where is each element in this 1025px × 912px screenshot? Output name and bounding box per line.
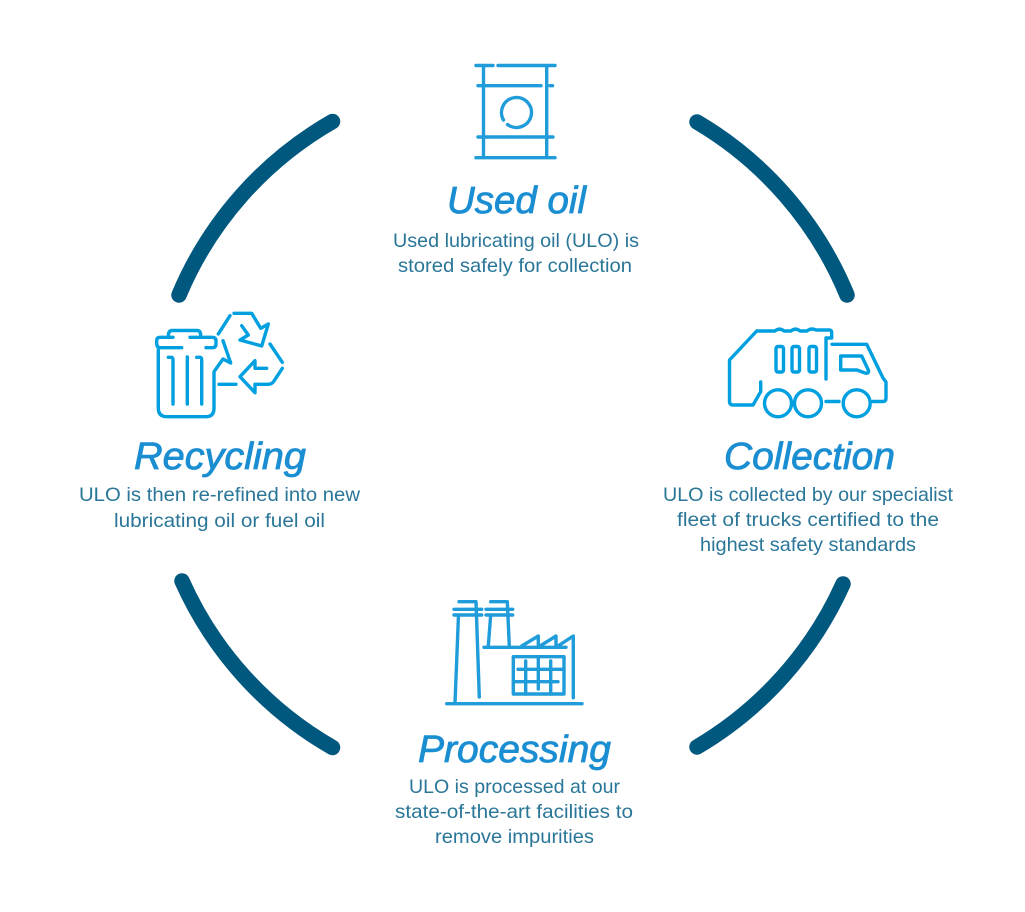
panel: processing [395,602,633,848]
heading: processing: Processing [418,729,611,771]
arc: bottom right [697,584,843,747]
text: processing description: state-of-the-art facilities to [395,801,633,823]
text: used oil description: Used lubricating oil (ULO) is [393,230,639,252]
heading: used oil: Used oil [447,180,588,222]
panel: recycling [79,313,361,532]
text: processing description: ULO is processed at our [409,776,621,798]
text: used oil description [393,230,639,277]
text: recycling description [79,484,361,532]
icon: recycling bin with arrows [157,313,282,417]
text: processing description: remove impurities [435,826,594,848]
text: collection description: ULO is collected by our specialist [663,484,954,506]
icon: truck [730,329,886,417]
arc: top right [697,122,847,295]
text: recycling description: ULO is then re-refined into new [79,484,361,506]
cycle ring arcs [179,122,847,748]
text: processing description [395,776,633,848]
panel: collection [663,329,954,556]
arc: bottom left [182,581,332,748]
text: used oil description: stored safely for collection [398,255,632,277]
icon: factory [447,602,582,704]
heading: collection: Collection [724,436,895,478]
text: collection description [663,484,954,556]
heading: recycling: Recycling [134,436,306,478]
arc: top left [179,122,332,295]
text: collection description: highest safety standards [700,534,916,556]
icon: oil barrel [476,66,555,158]
panel: used oil [393,66,639,277]
text: collection description: fleet of trucks certified to the [677,509,939,531]
text: recycling description: lubricating oil or fuel oil [114,510,325,532]
